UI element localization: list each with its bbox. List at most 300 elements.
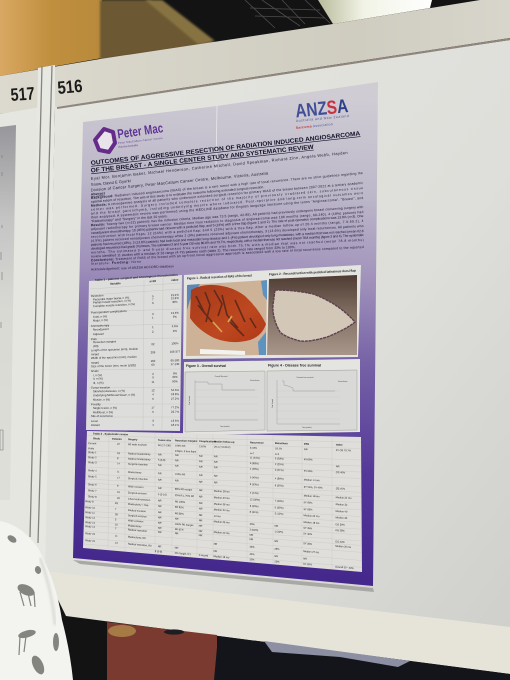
table 2 rows: Wide excision	[128, 519, 144, 523]
table 1 rows: Site of recurrence	[91, 414, 114, 418]
table 2 rows: NR	[199, 525, 203, 528]
abstract text: Background: Radiation induced angiosarcoma (RIAS) of the breast is a rare tumor with a high rate of local recurrence. There are no strict guidelines regarding the	[91, 171, 363, 200]
table 2 rows: 89% R0 margin	[175, 488, 193, 492]
table 2 rows: NR	[158, 505, 162, 508]
table 1 rows: Grade	[91, 369, 99, 373]
table 2 rows: NR	[213, 543, 218, 546]
table 1 rows: 31.8%	[171, 296, 179, 300]
table 2 rows: 5Y OS 79.7%	[336, 449, 352, 452]
table 2 header: Study	[93, 437, 101, 440]
table 2 rows: NR	[336, 465, 340, 468]
table 2 rows: NR	[158, 479, 162, 482]
table 2 header: Tumor size	[158, 439, 172, 442]
table 2 rows: Median 30	[335, 516, 348, 520]
table 2 rows: Median 18 mo	[213, 555, 230, 559]
table 1 rows: 60	[151, 363, 155, 367]
table 2 rows: NR	[199, 466, 203, 469]
table 2 rows: Median 25 mo	[214, 520, 230, 524]
bright ceiling light	[318, 0, 432, 24]
table 2 rows: Study 14	[85, 525, 96, 529]
table 2 rows: 31.8%	[250, 447, 258, 450]
table 1 rows: Partial muscle resection, n (%)	[93, 298, 131, 305]
table 2 rows: 3 (38%)	[250, 462, 259, 465]
table 2 rows: 17	[117, 477, 120, 480]
table 2 rows: NR	[199, 514, 203, 517]
red carpet	[107, 622, 217, 680]
table 2 rows: 11	[117, 470, 120, 474]
table 1 rows: Focality	[91, 402, 101, 406]
table 1 rows: 3	[152, 312, 154, 316]
table 2 rows: 10%	[274, 560, 280, 564]
table 1 rows: 18.1%	[171, 423, 179, 427]
table 2 rows: Median 30 mo	[214, 496, 230, 500]
table 1 rows: Skin/subcutaneous, n (%)	[93, 389, 125, 393]
table 2 rows: Surgical resection	[128, 477, 149, 481]
poster centre fold	[216, 105, 217, 170]
authors: Eyal Mor, Benjamin Baker, Michael Henderson, Catherine Mitchell, David Speakman, Richard Zinn, Angela Webb, Hayden	[91, 150, 348, 181]
table 2 rows: NR	[158, 487, 162, 490]
table 1 sheet	[86, 275, 182, 431]
table 1 rows: Distant	[91, 423, 100, 427]
tan shoe	[108, 625, 136, 637]
table 1 rows: 9%	[173, 329, 178, 333]
label 517: 517	[10, 83, 35, 105]
table 2 rows: 8	[117, 457, 119, 460]
table 2 rows: Mastectomy	[128, 471, 142, 474]
abstract text: patients had recurred (18%), 3 (13.6%) patients had both local and metastatic lung disease and 1 (4%) patient developed only lung metastasis, with a median that was not reached (mean 62.8	[91, 229, 364, 247]
table 2 rows: NR	[199, 481, 203, 484]
table 2 rows: NR	[199, 489, 203, 492]
abstract text	[91, 171, 364, 271]
table 2 rows: 5 (45%)	[250, 476, 259, 480]
shirt hem	[264, 641, 410, 667]
logo: Peter Mac	[95, 120, 164, 152]
table 2 rows: NR	[158, 511, 162, 514]
table 2 rows: 5Y 30%	[303, 563, 313, 567]
table 2 rows: Study 9	[85, 500, 94, 504]
table 2 rows: 13	[115, 542, 118, 545]
table 2 rows: Radical mastectomy	[128, 458, 151, 461]
poster content	[83, 96, 364, 572]
neighbouring poster edge	[0, 125, 16, 500]
table 2 rows: NR	[175, 532, 179, 535]
table 1 rows: Single lesion, n (%)	[93, 406, 117, 410]
table 1 rows: Underlying fat/breast tissue, n (%)	[93, 393, 135, 397]
table 1 rows: 105-377	[170, 349, 181, 354]
table 1 rows: 4	[152, 392, 154, 396]
table 2 rows: NR	[199, 474, 203, 477]
table 1 rows: Multifocal, n (%)	[93, 410, 113, 414]
y axis label: Cum Survival	[188, 395, 191, 405]
abstract text: Conclusions: Treatment of RIAS of the breast with an up-front novel aggressive approach is associated with a low rate of local recurrence compared to the reported	[91, 245, 364, 262]
main display panel	[44, 40, 510, 630]
table 2 rows: 20	[117, 497, 120, 500]
foreground person: white shirt with zebra print	[0, 521, 73, 680]
table 2 rows: Study 1	[88, 451, 97, 454]
floor and people below the board	[107, 622, 510, 680]
table 2 rows: NR	[175, 465, 179, 468]
table 1 rows: 100%	[171, 341, 179, 345]
table 1 rows: 40%	[172, 375, 178, 379]
table 2 rows: Study 12	[85, 516, 96, 520]
table 2 rows: 6 (30%)	[250, 505, 259, 508]
table 2 rows: NR	[199, 530, 203, 533]
table 2 rows: Median 24 mo	[214, 508, 230, 512]
table 2 rows: n=4	[275, 453, 280, 456]
abstract text: (4.5%) patient received neoadjuvant chemotherapy while 2 (9%) patients received adjuvant chemotherapy. 3 (13.6%) developed only local recurrences. All patients who	[91, 224, 364, 243]
table 2 header: Surgery	[128, 438, 138, 441]
table 1 rows: 2	[152, 330, 154, 334]
table 2 rows: 18.1%	[275, 447, 283, 451]
table 2 rows: Median 18 mo	[304, 494, 320, 498]
table 2 rows: 22	[117, 443, 120, 446]
table 1 rows: 65-180	[171, 358, 180, 362]
figure 4 caption: Figure 4 - Disease free survival	[268, 364, 321, 368]
table 2 rows: Radical resection, R0	[128, 543, 152, 548]
table 2 rows: NR	[175, 479, 179, 483]
x axis label: Time (months)	[220, 425, 230, 428]
table 2 rows: 3Y 55%, 5Y 40%	[304, 486, 323, 490]
label 516: 516	[57, 76, 83, 98]
table 2 rows: 7	[115, 508, 117, 511]
neighbouring panel 517	[0, 107, 40, 565]
table 2 rows: 7 (23%)	[275, 500, 284, 503]
beam shadow line	[57, 39, 510, 108]
table 2 rows: NR	[214, 475, 218, 478]
blue drape	[187, 284, 200, 310]
table 2 rows: OS 45%	[336, 487, 346, 491]
table 2 rows: NR	[303, 557, 307, 561]
table 2 rows: NR	[158, 499, 162, 503]
table 1 rows: 54.5%	[171, 388, 179, 392]
survival curve	[195, 382, 255, 390]
table 2 rows: 13 mo	[214, 515, 221, 518]
table 2 rows	[85, 442, 355, 570]
table 2 rows: 100% R0 margin	[175, 523, 194, 527]
table 2 rows: Study 6	[88, 483, 97, 487]
table 1 rows: Total, n (%)	[93, 314, 107, 319]
table 2 rows: 9 (53%)	[250, 483, 259, 486]
table 1 rows: 7	[152, 297, 154, 301]
table 2 rows: Study 7	[88, 489, 97, 493]
x axis label: Time (months)	[302, 426, 312, 429]
title: OF THE BREAST - A SINGLE CENTER STUDY AND SYSTEMATIC REVIEW	[90, 144, 314, 174]
wound yellow tissue	[213, 316, 232, 332]
table 2 header: Patients	[112, 438, 122, 441]
table 2 rows: NR	[249, 534, 253, 537]
table 2 rows: Study 8	[88, 495, 97, 499]
table 1 rows: Tumor invasion	[91, 385, 110, 390]
table 2 rows: NR	[214, 481, 218, 484]
table 1 rows: Chemotherapy	[91, 323, 110, 328]
table 1 rows: 9%	[173, 371, 178, 375]
table 2 title: Table 2 - Systematic review	[93, 433, 128, 436]
table 1 rows: III, n (%)	[93, 381, 104, 385]
abstract text: Abstract	[91, 191, 106, 196]
table 2 rows: NR	[199, 507, 203, 511]
abstract text: adjuvant radiotherapy for primary breast cancer. Median time from radiation to diagnosis of angiosarcoma was 106 months (range, 60-240). 4 (18%) patients had	[91, 210, 364, 231]
table 2 rows: Radical mastectomy	[128, 452, 151, 456]
ANZSA country line: Australia and New Zealand	[296, 114, 349, 123]
table 2 rows: 16	[115, 523, 118, 527]
table 2 rows: NR	[175, 454, 179, 457]
table 2 rows: Current	[88, 442, 97, 445]
table 2 rows: Surgical excision	[128, 491, 147, 495]
table 1 rows: 4	[152, 423, 154, 427]
table 1 rows: Complete muscle resection, n (%)	[93, 302, 135, 308]
blue drape upper right	[261, 280, 267, 300]
table 2 rows: 7	[115, 527, 117, 531]
diagonal wall beam	[145, 0, 215, 44]
table 2 rows: 5 (28%)	[275, 457, 284, 461]
table 2 rows: Study 2	[88, 456, 97, 459]
logo ring	[95, 129, 115, 152]
surgical ruler	[200, 349, 245, 355]
table 2 columns	[108, 432, 332, 569]
logo wordmark: Peter Mac	[116, 120, 164, 141]
table 2 rows: 5Y 45%	[303, 527, 313, 530]
table 2 rows: R0 100%	[175, 500, 186, 504]
dark shoe	[164, 629, 184, 635]
table 2 rows: 35%	[249, 546, 255, 549]
poster sheet	[73, 82, 378, 586]
table 2 rows: NR	[158, 464, 162, 467]
table 2 rows: 5 (3-8)	[155, 550, 162, 554]
table 1 rows: 3	[152, 419, 154, 423]
table 2 rows: 38	[115, 513, 118, 516]
table 2 rows: R0 86%	[175, 512, 185, 516]
figure 2 photo: flap reconstruction	[267, 275, 357, 355]
table 2 header: Recurrence	[250, 441, 264, 445]
logo subtext: Peter MacCallum Cancer Centre	[118, 136, 163, 145]
table 2 rows: NR	[158, 531, 162, 534]
shirt fold shadow	[40, 558, 55, 625]
table 1 rows: 13.6%	[171, 419, 179, 423]
table 2 rows: Study 4	[88, 469, 97, 473]
table 1 title: Table 1 - patients surgical and oncological characteristics	[95, 273, 178, 282]
table 2 rows: 5Y 50%	[304, 470, 313, 473]
table 1 rows: 17-130	[171, 362, 180, 366]
table 2 rows: Wide excision	[128, 485, 144, 489]
abstract text: Results: Twenty-two (n=22) patients met the inclusion criteria. Median age was 73.5 (range, 42-85). All patients had previously undergone breast conserving surgery with	[91, 205, 364, 227]
table 1 rows: Neoadjuvant	[93, 327, 109, 332]
table 2 rows: n=7	[250, 452, 255, 455]
table 2 rows: 18	[117, 452, 120, 455]
figure 1 caption: Figure 1 - Radical resection of RIAS of the breast	[187, 273, 253, 280]
abstract text: and the breast parenchyma, including underlying muscle where indicated. Post-operative and long-term oncological outcomes were	[91, 191, 363, 216]
panel: surgical photographs	[183, 265, 361, 359]
chart: disease free survival	[267, 370, 357, 431]
table 2 rows: R0 wide excision	[128, 443, 147, 447]
table 2 rows: 5	[115, 518, 117, 521]
table 2 rows: 11	[115, 534, 118, 538]
top frame beam	[0, 0, 510, 114]
table 2 rows: Study 5	[88, 475, 97, 479]
table 1 rows: 5	[152, 294, 154, 298]
table 2 header: Other	[336, 444, 343, 447]
gridlines	[277, 391, 340, 419]
table 2 rows: R0 margin, R1	[175, 552, 192, 556]
bottom frame beam	[44, 571, 510, 674]
table 2 rows: NR	[158, 453, 162, 457]
table 2 rows: NR	[199, 534, 203, 537]
table 2 rows: Surgical excision	[128, 514, 147, 518]
table 2 rows: NR	[304, 448, 308, 451]
table 1 rows: 17	[151, 405, 155, 409]
table 2 rows: Radical excision	[128, 509, 147, 513]
table 2 header	[93, 437, 343, 447]
table 2 rows: Median 20 mo	[214, 531, 230, 535]
table 2 rows: Mastectomy, R0	[128, 536, 146, 540]
table 1 rows: 50%	[172, 379, 178, 383]
table 2 rows: Study 11	[85, 511, 95, 515]
table 1 rows: Local	[91, 419, 98, 423]
table 2 rows: 5Y 65%	[304, 508, 313, 512]
table 1 rows: 5%	[173, 315, 177, 319]
table 2 rows: NR	[249, 538, 253, 541]
table 2 header: Metastasis	[275, 442, 288, 445]
table 2 rows: 2 wound	[198, 554, 209, 558]
table 2 rows: 26	[115, 502, 118, 505]
table 2 rows: OS 50%	[335, 523, 346, 527]
table 1 rows: 23.2%	[171, 293, 179, 297]
table 2 rows: Radical resection	[128, 528, 148, 533]
table 1 rows: 13.6%	[171, 311, 179, 315]
table 2 rows: 1 (20%)	[274, 530, 284, 534]
red wound bed	[190, 285, 266, 342]
table 1 rows: Size of the tumor (mm, mean (±SD))	[91, 363, 136, 368]
table 2 rows: 100% R0	[175, 445, 186, 448]
table 2 rows: Median 14 mo	[304, 479, 320, 482]
table 2 header: DSS	[304, 443, 309, 446]
table 2 rows: 40%	[249, 553, 255, 556]
table 2 rows: Overall 30 - 40%	[335, 565, 355, 570]
table 2 rules	[84, 436, 362, 567]
table 2 rows: 9	[117, 485, 119, 488]
chart panel sheet	[183, 359, 360, 435]
table 1: patient characteristics	[86, 273, 182, 431]
table 2 header: Resection margins	[175, 439, 198, 443]
figure 1 photo: resection wound	[186, 280, 267, 356]
table 1 rows: Adjuvant	[93, 332, 104, 336]
table 2 rows: 5 (2-10)	[158, 493, 167, 497]
table 1 rows: I, n (%)	[93, 373, 102, 377]
abstract text: Acknowledgement: use of ANZSA ACCORD database	[91, 264, 174, 271]
table 2 rows: 5Y 35%	[303, 542, 313, 546]
table 2 rows: Median 20 mo	[335, 545, 352, 549]
authors: Snow, David E Gyorki	[91, 178, 131, 187]
table 2 rows: Study 3	[88, 461, 97, 464]
panel divider rails	[28, 65, 55, 575]
table 1 rows: 12	[151, 388, 155, 392]
table 2 rows: 20%	[249, 558, 255, 562]
table 2: systematic review	[83, 431, 362, 572]
table 2 rows: OS 40%	[335, 540, 345, 544]
table 2 rows: R0 81%	[175, 528, 185, 532]
abstract text: optimal extent of resection. The aim of this study is to evaluate the outcome following extended surgical resection.	[91, 185, 265, 204]
dark clothing	[214, 636, 510, 680]
table 2 rows: Study 13	[85, 521, 96, 525]
blue drape lower right	[258, 332, 266, 355]
table 1 rows: 1	[152, 325, 154, 329]
table 1 rows: range)	[91, 360, 99, 365]
table 1 rows: Resection	[91, 293, 104, 298]
table 1 rows: 11	[151, 380, 155, 384]
table 2 rows: 4 (44%)	[250, 492, 259, 495]
photo panel sheet	[183, 265, 361, 359]
abstract text: months. The estimated 3- and 5-year disease free survival rate was both 75.7% with a median that was not reached (mean 78.8 months)	[91, 238, 364, 255]
table 2 rows: Median 19 mo	[303, 521, 320, 525]
table 2 rows: R0 92%	[175, 506, 185, 509]
table 1 rows: (R0)	[93, 344, 99, 348]
abstract text: developed recurrence had grade 3 tumours. The estimated 3 and 5-year OS was 80.6% and 79.7%, respectively, with a median that was not reached (mean 78.8 months) (figure 3 and 4). The systematic	[91, 233, 364, 251]
shaded wall	[100, 0, 215, 60]
abstract text: neoadjuvant chemotherapy. 10 (45%) patients had closure with a pedicled flap, and 5 (23%) with a free flap (figure 1 and 2). The rate of post-operative complications was 13.6% (n=3). One	[91, 214, 364, 235]
table 1 rows: 18.8%	[171, 392, 179, 396]
table 1 rules	[89, 278, 181, 430]
table 2 rows: 6 (35%)	[275, 484, 284, 488]
table 2 rows: NR	[175, 459, 179, 462]
table 2 rows: NR	[274, 540, 278, 543]
abstract text: literature. Funding: None	[91, 260, 141, 266]
table 1 rows: 160	[151, 359, 156, 363]
table 2 sheet	[83, 431, 362, 572]
table 1 rows: 22.7%	[171, 410, 179, 414]
table 1 header: n=22	[149, 279, 157, 283]
table 2 rows: NR	[214, 455, 218, 458]
table 2 rows: study	[88, 447, 95, 450]
table 2 rows: 3 (12%)	[275, 512, 284, 516]
table 2 rows: Chest wall resection	[128, 498, 151, 502]
y axis label: Cum Survival	[271, 398, 274, 408]
table 2 rows: NR	[175, 517, 179, 521]
table 1 rows: Width of the specimen (mm), median	[91, 355, 137, 360]
table 2 rows: 5Y 60%	[304, 501, 313, 505]
table 2 rows: Median 24 mo	[336, 496, 352, 500]
figure 2 caption: Figure 2 - Reconstruction with pedicled latissimus dorsi flap	[269, 269, 356, 276]
logo location: Victoria Australia	[118, 143, 138, 149]
table 2 rows: 14	[117, 462, 120, 465]
table 2 rows: Study 10	[85, 506, 96, 510]
table 2 header: Median follow-up	[214, 440, 235, 444]
table 2 rows: 40-60%	[304, 458, 313, 462]
table 2 rows: 25% R1, 75% R0	[175, 494, 195, 498]
abstract text: Methods: A retrospective analysis of all patients who underwent extended surgical resection for primary RIAS of the breast between 2007-2022 at a tertiary academic	[91, 181, 363, 208]
legend: Survival function	[250, 379, 260, 382]
poster shadow	[73, 560, 374, 592]
table 2 rows: 20.4 (7.9-59.2)	[214, 446, 231, 449]
table 2 header: Complications	[199, 440, 217, 443]
table 2 rows: OS 40%	[336, 471, 346, 474]
chart title: Disease free survival	[297, 377, 314, 379]
table 1 rows: 2	[152, 372, 154, 376]
table 1 rows: Pectoralis major fascia, n (%)	[93, 296, 129, 302]
table 2 rows: 8 (31%)	[250, 511, 259, 514]
table 2 rows: NR	[214, 466, 218, 469]
table 2 rows: 8 flaps, 5 free flaps	[175, 450, 197, 454]
table 2 rows: NR	[199, 519, 203, 522]
table 2 rows: Median 28 mo	[214, 490, 230, 494]
pale skin flap	[273, 290, 355, 341]
table 2 rows: 3 (21%)	[275, 469, 284, 472]
abstract text: reconstruction with local flaps; 12 (54%) with a pedicled flap; and 5 (23%) with a free flap. After a median follow-up of 20.4 months (range, 7.9-59.2), 4	[91, 219, 364, 239]
table 2 rows: 4 (36%)	[275, 477, 284, 481]
table 1 header: value	[171, 278, 179, 282]
table 1 rows: 1	[152, 316, 154, 320]
axes	[195, 380, 258, 420]
ANZSA association line: Sarcoma Association	[296, 122, 333, 130]
table 1 rows: Path	[91, 337, 97, 341]
